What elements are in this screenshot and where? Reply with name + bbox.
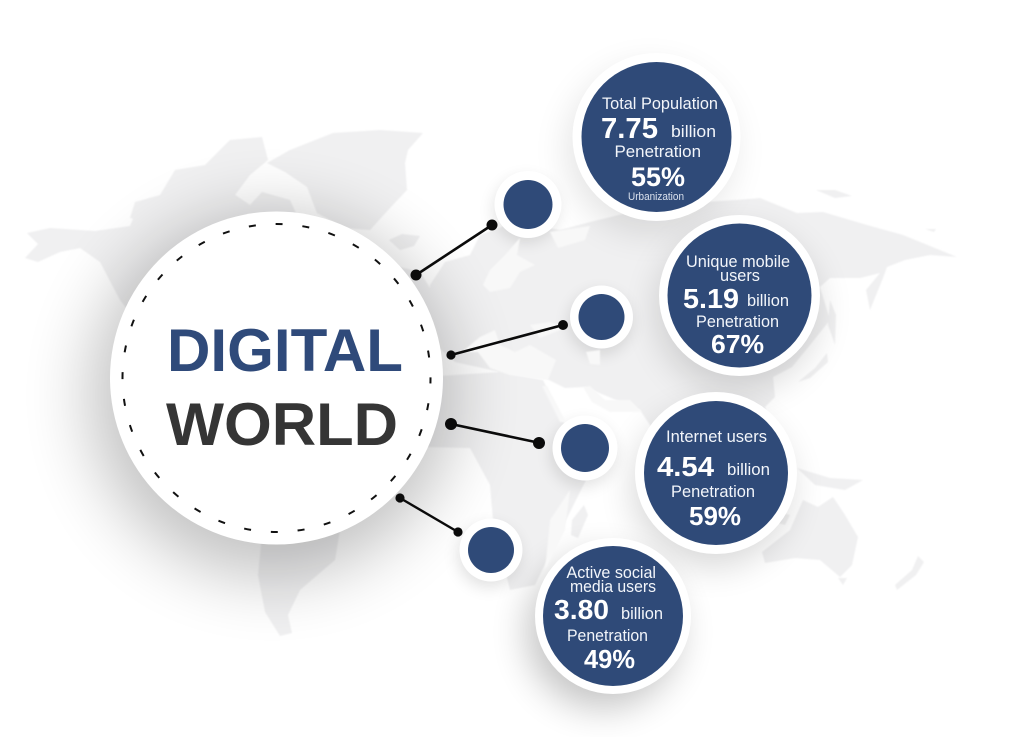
sea: Red Sea [542, 386, 566, 422]
shadow: internet users [634, 410, 790, 566]
sea: Persian Gulf and Arabian coast [583, 386, 642, 412]
drop shadows [90, 68, 818, 708]
connector 4 [395, 493, 463, 537]
title: DIGITAL: DIGITAL [167, 317, 403, 384]
small node circles [460, 171, 633, 582]
connector 3 [445, 418, 545, 449]
label: Urbanization: Urbanization [628, 191, 684, 203]
map: Australia [762, 497, 858, 577]
map: Iceland [389, 234, 420, 250]
label: Penetration: Penetration [614, 142, 701, 161]
value: 55%: 55% [631, 162, 685, 192]
panel: total population [572, 53, 740, 221]
value: 49%: 49% [584, 644, 635, 674]
map: Eurasia [430, 198, 957, 520]
map: Indonesia and New Guinea [768, 468, 863, 525]
sea: White Sea and Arctic coast [550, 226, 590, 248]
panel: unique mobile users [659, 215, 820, 376]
map: Madagascar [571, 505, 588, 538]
map: Tasmania [838, 578, 847, 585]
value: 5.19 billion: billion [747, 292, 789, 310]
connector lines [395, 220, 568, 537]
value: 4.54 billion: 4.54 [657, 451, 714, 482]
main circle [110, 212, 443, 544]
shadow: mobile users [658, 230, 818, 390]
label: Penetration: Penetration [567, 627, 648, 645]
node 1 [494, 171, 562, 238]
label: Internet users: Internet users [666, 428, 767, 446]
label: Unique mobile users: users [720, 267, 760, 285]
map: South America [258, 530, 340, 636]
map: Canadian Arctic islands [130, 137, 268, 225]
map: New Zealand [895, 556, 924, 590]
map: Sakhalin and Japan [798, 300, 836, 382]
title: WORLD: WORLD [166, 391, 398, 458]
node 2 [570, 286, 633, 348]
value: 5.19 billion: 5.19 [683, 283, 739, 314]
label: Active social media users: Active social [566, 564, 656, 582]
map: Arctic islands of Russia [816, 190, 936, 232]
map: Greenland [267, 130, 423, 230]
map: Africa [400, 372, 600, 590]
label: Active social media users: media users [570, 578, 656, 596]
shadow: small circles [458, 178, 631, 587]
sea: Black Sea [530, 322, 565, 338]
value: 4.54 billion: billion [727, 461, 770, 479]
value: 3.80 billion: billion [621, 605, 663, 623]
node 4 [460, 518, 522, 582]
shadow: main circle [90, 213, 454, 577]
value: 3.80 billion [554, 594, 663, 625]
label: Penetration: Penetration [671, 483, 755, 501]
node 3 [552, 416, 618, 480]
value: 7.75 billion: billion [671, 122, 716, 141]
value: 7.75 billion [601, 113, 716, 145]
value: 67%: 67% [711, 329, 764, 359]
world map [25, 130, 957, 636]
value: 59%: 59% [689, 501, 741, 531]
sea: Mediterranean [462, 330, 556, 380]
label: Active social media users [566, 564, 656, 596]
value: 3.80 billion: 3.80 [554, 594, 609, 625]
shadow: total population [568, 68, 732, 232]
value: 4.54 billion [657, 451, 770, 482]
panel: active social media users [535, 538, 691, 694]
connector 2 [446, 320, 568, 360]
value: 7.75 billion: 7.75 [601, 113, 658, 145]
label: Total Population: Total Population [602, 95, 718, 113]
main circle disc [110, 212, 443, 544]
sea: Mozambique Channel [545, 490, 570, 570]
sea: Caspian [586, 350, 600, 365]
value: 5.19 billion [683, 283, 789, 314]
dashed ring [122, 224, 430, 532]
shadow: social media [527, 556, 679, 708]
label: Penetration: Penetration [696, 313, 779, 331]
label: Unique mobile users: Unique mobile [686, 253, 790, 271]
map: North America [25, 188, 450, 460]
sea: Baltic [483, 238, 535, 292]
label: Unique mobile users [686, 253, 790, 285]
panel: internet users [635, 392, 797, 554]
connector 1 [410, 220, 498, 280]
map seas and lakes [462, 226, 642, 570]
